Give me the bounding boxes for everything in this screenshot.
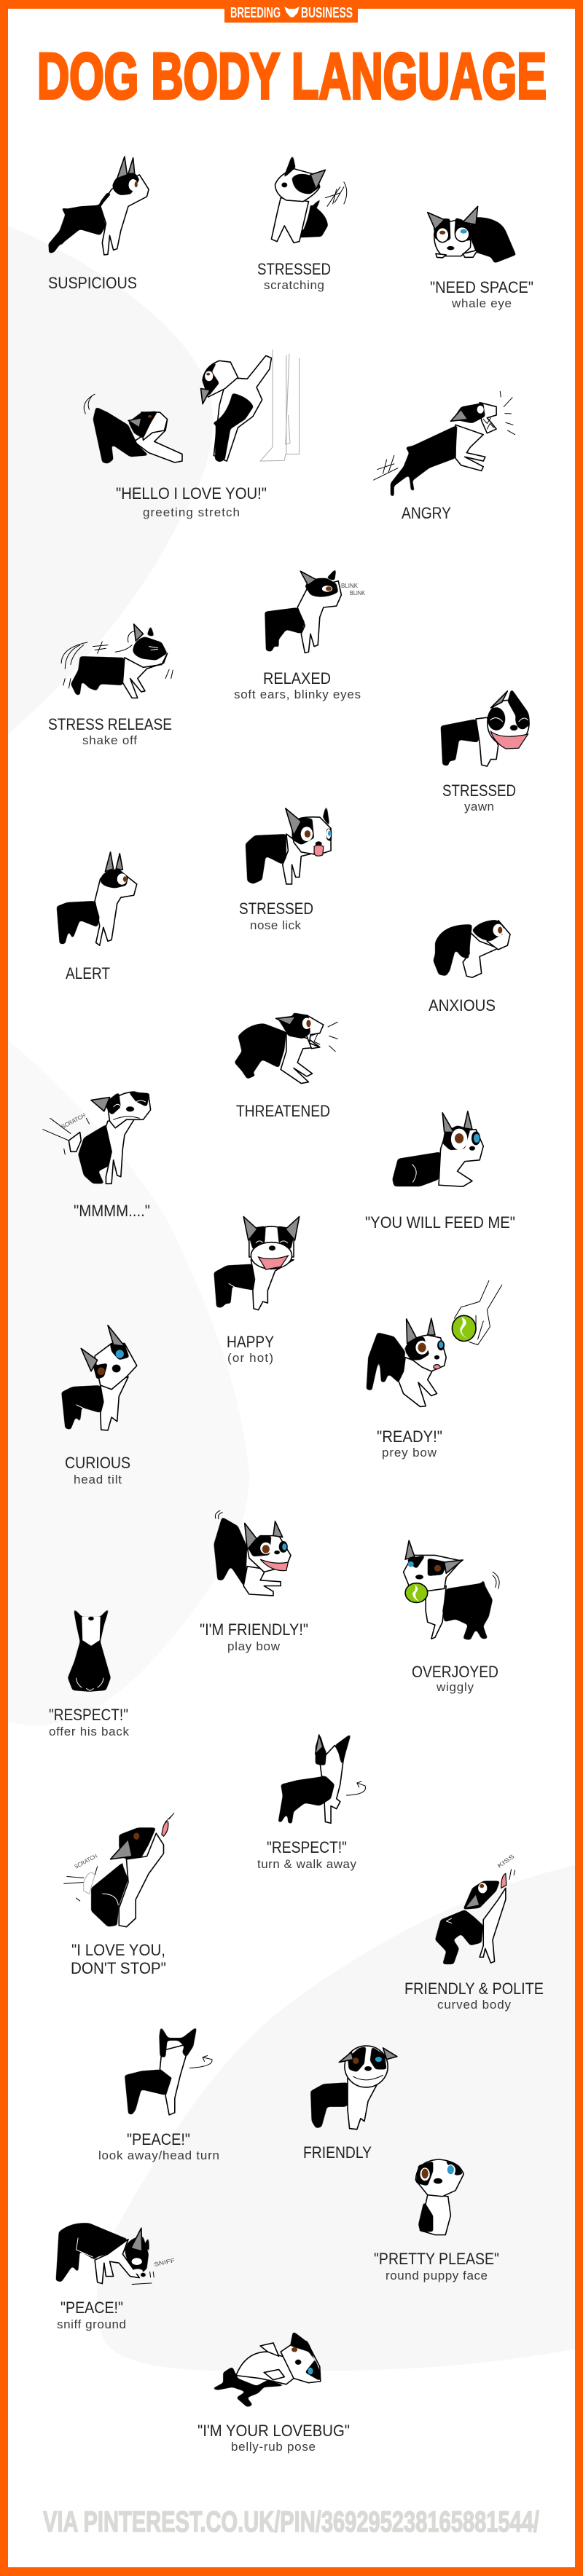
panel: suspicious [48,157,149,292]
panel: friendly [303,2046,397,2162]
logo wordmark left: BREEDING [230,5,281,21]
sublabel: offer his back [49,1725,130,1738]
label: THREATENED [236,1102,330,1120]
sublabel: belly-rub pose [231,2440,316,2454]
label: ANGRY [402,504,451,522]
label: RELAXED [263,669,331,688]
sublabel: prey bow [382,1446,437,1460]
icon: stretching dog [84,394,182,464]
icon: dog from behind [68,1607,111,1692]
label: HAPPY [227,1333,274,1351]
panel: i love you don't stop [64,1813,174,1977]
icon: dog licking while scratched [64,1813,174,1927]
panel: lovebug [197,2331,350,2454]
icon: prey bow dog with ball [367,1280,502,1406]
icon: dog turning away [278,1733,366,1824]
label: OVERJOYED [412,1663,498,1681]
label: "NEED SPACE" [430,278,533,296]
sublabel: wiggly [436,1680,474,1694]
sublabel: shake off [82,733,137,747]
panel: peace head turn [98,2025,219,2162]
icon: belly rub dog [212,2331,321,2407]
text: blink: BLINK [350,590,366,596]
icon: friendly dog [310,2046,397,2130]
panel: anxious [429,920,510,1015]
icon: curved body dog [435,1870,515,1964]
panel: need space [428,206,533,310]
panel: curious [61,1326,137,1486]
label: "PEACE!" [127,2130,190,2148]
icon: sitting dog [392,1111,483,1186]
icon: happy dog [214,1216,300,1310]
icon: shaking dog [61,624,173,698]
panel: i'm friendly [200,1510,308,1653]
sublabel: round puppy face [386,2269,488,2282]
label: "MMMM...." [74,1202,150,1220]
icon: head tilt dog [61,1326,137,1430]
label: STRESS RELEASE [48,715,172,733]
label: "HELLO I LOVE YOU!" [116,484,267,503]
icon: relaxed dog [265,567,341,653]
panel: peace sniff ground [56,2223,176,2331]
label: FRIENDLY & POLITE [404,1980,544,1998]
text: kiss: KISS [496,1853,515,1870]
panel: relaxed [234,567,366,701]
icon: dog being scratched [43,1092,151,1183]
label line 2: DON'T STOP" [71,1959,166,1977]
icon: suspicious dog [48,157,149,255]
sublabel: curved body [437,1998,512,2012]
sublabel: head tilt [74,1473,122,1486]
text: scratch: SCRATCH [74,1853,98,1870]
label: STRESSED [239,899,313,918]
icon: sniffing dog [56,2223,154,2284]
sublabel: scratching [264,278,324,292]
panel: friendly and polite [404,1853,544,2012]
label: "PRETTY PLEASE" [374,2250,499,2268]
label: "RESPECT!" [49,1706,128,1724]
panel: hello i love you [84,350,300,519]
label: FRIENDLY [303,2143,372,2162]
panel: mmmm [43,1092,151,1220]
label: "I'M FRIENDLY!" [200,1620,308,1639]
icon: alert dog [57,852,137,945]
sublabel: yawn [464,800,494,814]
panel: stressed scratching [257,154,347,292]
sublabel: sniff ground [57,2317,126,2331]
label: STRESSED [257,260,331,278]
panel: stress release [48,624,173,747]
icon: whale eye dog [428,206,516,264]
sublabel: soft ears, blinky eyes [234,688,361,701]
text: scratch: SCRATCH [60,1112,87,1130]
label: "PEACE!" [60,2299,123,2317]
label: CURIOUS [65,1454,130,1472]
panel: angry [374,391,515,522]
icon: anxious dog [433,920,510,977]
icon: dog standing on wall with curtain [201,350,300,462]
panel: respect offer back [49,1607,130,1738]
sublabel: turn & walk away [257,1857,357,1871]
icon: puppy face dog [415,2159,463,2235]
panel: happy [214,1216,300,1365]
icon: angry dog [374,391,515,497]
icon: nose licking dog [246,803,332,884]
logo wordmark right: BUSINESS [301,5,353,21]
panel: stressed nose lick [239,803,332,932]
sublabel: nose lick [250,918,302,932]
label: "RESPECT!" [267,1838,347,1856]
icon: yawning dog [441,688,530,766]
sublabel: (or hot) [227,1351,273,1365]
text: blink: BLINK [341,583,359,589]
panel: alert [57,852,137,982]
sublabel: whale eye [451,296,512,310]
icon: play bow dog [214,1510,291,1596]
icon: dog looking away [125,2025,212,2115]
panel: respect turn away [257,1733,366,1871]
icon: wiggly dog with ball [404,1540,499,1640]
panel: you will feed me [365,1111,515,1232]
sublabel: play bow [227,1639,281,1653]
label: SUSPICIOUS [48,274,137,292]
panel: stressed yawn [441,688,530,814]
panel: threatened [234,1012,337,1120]
logo dog icon [284,7,300,17]
sublabel: look away/head turn [98,2148,219,2162]
panel: ready [367,1280,502,1460]
label: "YOU WILL FEED ME" [365,1213,515,1232]
label: ALERT [66,964,110,982]
panel: pretty please [374,2159,499,2282]
panel: overjoyed [404,1540,499,1694]
label: "I LOVE YOU, [71,1941,165,1959]
text: sniff: SNIFF [154,2257,176,2268]
label: ANXIOUS [429,996,496,1015]
label: "READY!" [377,1427,442,1446]
label: "I'M YOUR LOVEBUG" [197,2422,350,2440]
logo badge [224,0,358,23]
icon: threatened dog [234,1012,337,1084]
icon: scratching dog [271,154,347,243]
sublabel: greeting stretch [143,505,240,519]
label: STRESSED [442,781,516,800]
